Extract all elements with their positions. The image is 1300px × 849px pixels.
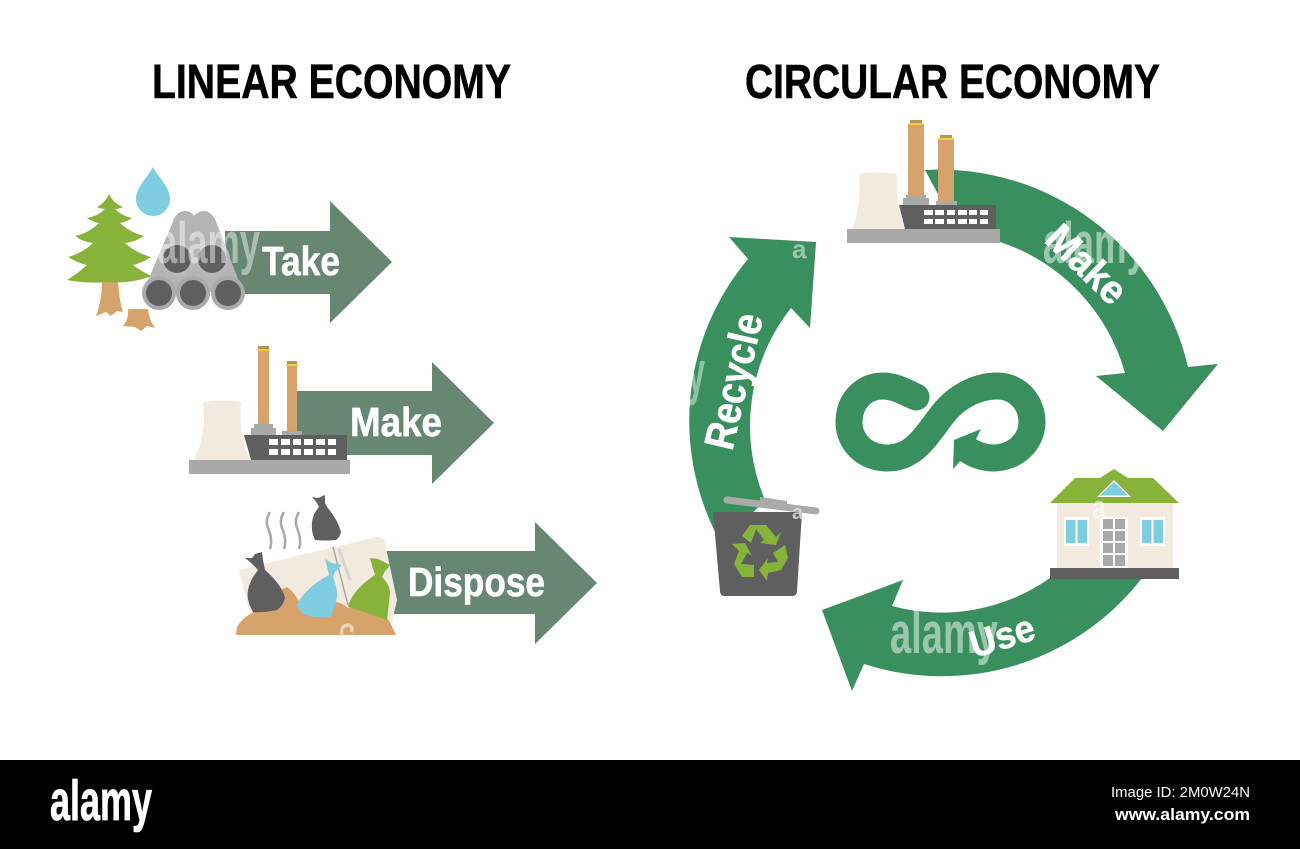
label: dispose: Dispose bbox=[408, 559, 545, 605]
title: circular economy: CIRCULAR ECONOMY bbox=[745, 56, 1160, 109]
footer bar bbox=[0, 760, 1300, 849]
icon: house bbox=[1050, 469, 1179, 579]
label: circular make: Make bbox=[1037, 216, 1136, 314]
title: linear economy: LINEAR ECONOMY bbox=[152, 56, 511, 109]
icon: falling rubbish bag bbox=[312, 495, 341, 540]
text: image id: Image ID: 2M0W24N bbox=[1111, 784, 1250, 801]
arrow: circular make bbox=[925, 170, 1218, 431]
icon: landfill bbox=[236, 537, 397, 635]
icon: stacked pipes bbox=[142, 211, 245, 310]
icon: recycling bin bbox=[713, 497, 816, 596]
watermark: fragment on bin lid: a bbox=[792, 502, 804, 524]
panel: linear economy make step bbox=[189, 346, 494, 484]
arrow: take bbox=[225, 201, 392, 323]
panel: linear economy take step bbox=[67, 167, 392, 331]
watermark: fragment on recycle arc: y bbox=[687, 339, 705, 406]
icon: recycling symbol bbox=[732, 525, 788, 581]
icon: factory on loop bbox=[847, 120, 1000, 243]
arrow: circular recycle bbox=[689, 237, 816, 545]
arrow: dispose bbox=[380, 522, 597, 644]
label: circular use: Use bbox=[965, 607, 1040, 667]
label: make: Make bbox=[350, 399, 442, 445]
icon: water drop bbox=[136, 167, 170, 216]
watermark: alamy on use arc: alamy bbox=[890, 601, 998, 666]
label: take: Take bbox=[262, 238, 340, 284]
arrow: circular use bbox=[822, 578, 1142, 691]
watermark: alamy on take: alamy bbox=[157, 211, 260, 276]
panel: circular economy loop bbox=[687, 120, 1218, 691]
text: website: www.alamy.com bbox=[1114, 805, 1250, 824]
icon: factory bbox=[189, 346, 350, 474]
watermark: alamy on make arc: alamy bbox=[1043, 211, 1147, 276]
panel: linear economy dispose step bbox=[236, 495, 597, 644]
icon: tree stump bbox=[123, 309, 155, 331]
icon: infinity loop bbox=[849, 386, 1032, 469]
icon: pine tree bbox=[67, 194, 152, 316]
icon: smell lines bbox=[267, 512, 300, 549]
arrow: make bbox=[290, 362, 494, 484]
watermark: fragment on house: a bbox=[1092, 489, 1107, 527]
label: circular recycle: Recycle bbox=[695, 309, 772, 454]
logo: alamy: alamy bbox=[50, 769, 152, 833]
watermark: fragment at arrow head: a bbox=[792, 234, 807, 264]
